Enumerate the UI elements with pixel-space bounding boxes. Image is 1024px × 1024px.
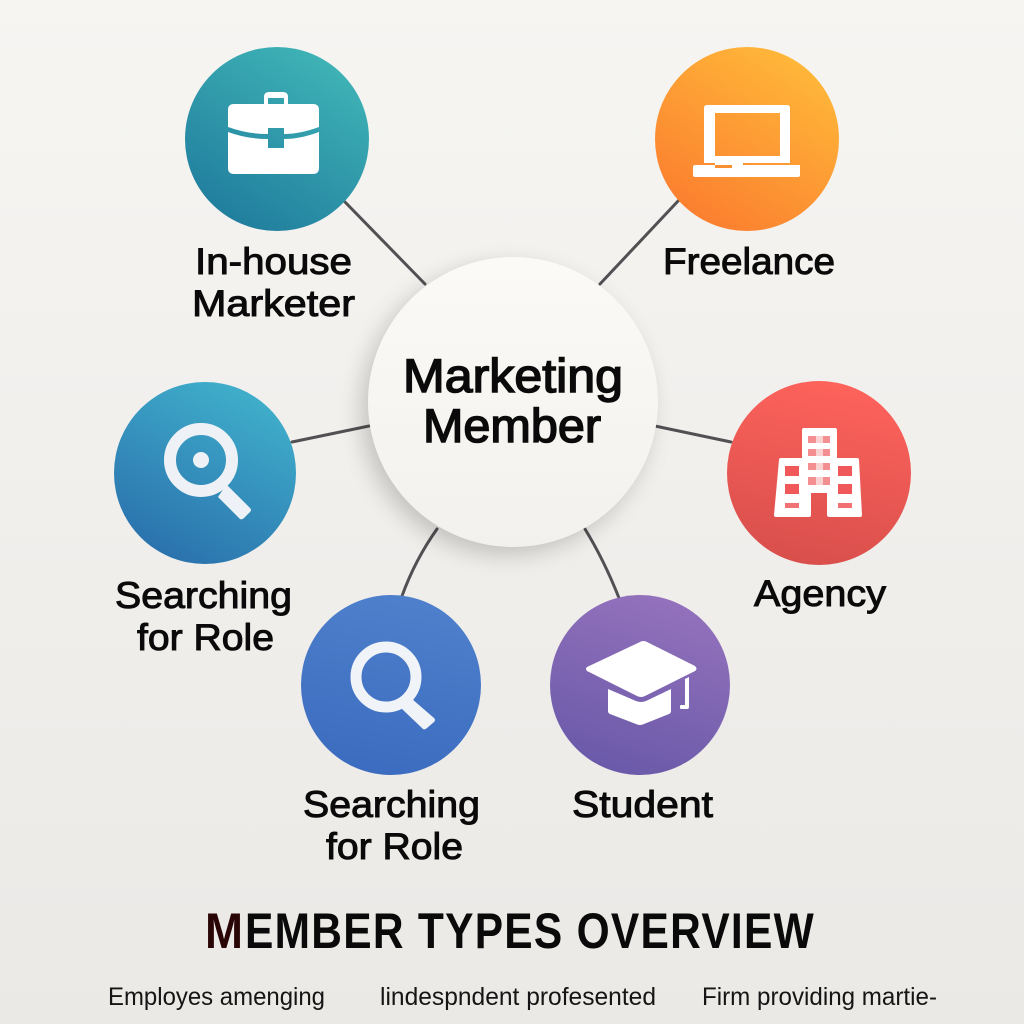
- node: Searching for Role (bottom): for Role: [326, 825, 463, 867]
- center node: Marketing Member: Marketing: [403, 349, 623, 402]
- node: Agency: Agency: [754, 572, 886, 614]
- icon: magnifier with dot: [170, 429, 251, 519]
- title: M: [205, 903, 243, 959]
- title: EMBER TYPES OVERVIEW: [245, 903, 815, 959]
- icon: graduation cap: [586, 641, 696, 725]
- icon: briefcase: [228, 92, 319, 174]
- icon: laptop: [693, 105, 800, 177]
- connector lines: [292, 200, 731, 598]
- node: Searching for Role (left): for Role: [137, 616, 274, 658]
- description texts: lindespndent profesented: [380, 983, 656, 1011]
- node: Searching for Role (bottom): [301, 595, 481, 867]
- node: Student: [550, 595, 730, 825]
- description texts: Employes amenging: [108, 983, 325, 1011]
- icon: magnifier: [356, 647, 435, 729]
- description texts: Firm providing martie-: [702, 983, 937, 1011]
- node: Agency: [727, 381, 911, 614]
- node: Searching for Role (bottom): Searching: [303, 783, 480, 825]
- center node: Marketing Member: Member: [423, 399, 601, 452]
- node: Freelance: [655, 47, 839, 282]
- center node: Marketing Member: [362, 257, 658, 554]
- node: Searching for Role (left): [114, 382, 296, 658]
- icon: office building: [774, 428, 862, 517]
- node: Freelance: Freelance: [663, 240, 835, 282]
- node: Student: Student: [572, 783, 714, 825]
- node: Searching for Role (left): Searching: [115, 574, 292, 616]
- node: In-house Marketer: [185, 47, 369, 324]
- node: In-house Marketer: Marketer: [192, 282, 355, 324]
- node: In-house Marketer: In-house: [195, 240, 352, 282]
- description texts: [108, 983, 937, 1011]
